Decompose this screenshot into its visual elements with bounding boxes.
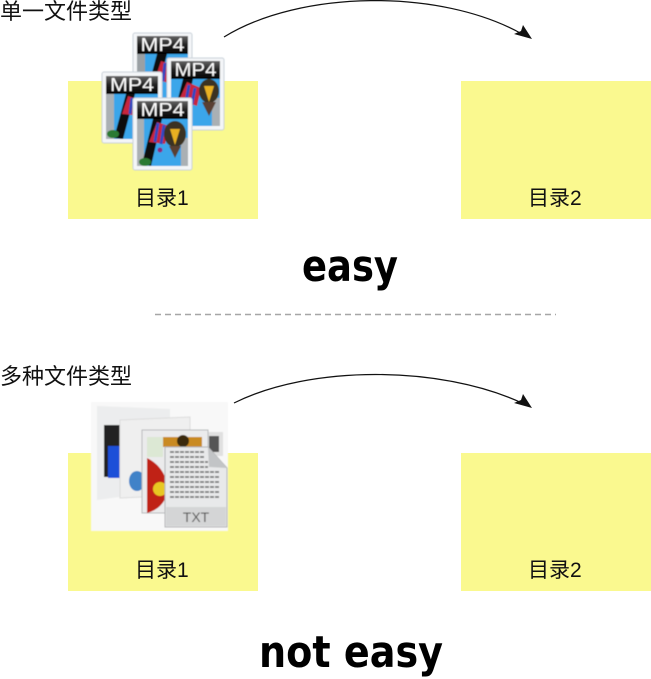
- arrow: move files (bottom): [234, 374, 532, 408]
- label: directory 1 (bottom): 目录1: [135, 559, 189, 582]
- icon: TXT document: TXT: [183, 509, 210, 525]
- label: directory 1 (top): 目录1: [135, 187, 189, 210]
- icon: mixed file types: [91, 402, 228, 531]
- panel: source directory 1 (bottom): [68, 453, 258, 591]
- panel: target directory 2 (bottom): [461, 453, 651, 591]
- heading: not easy: not easy: [259, 627, 443, 678]
- icon: MP4 back: MP4: [140, 35, 184, 55]
- heading: easy: easy: [302, 241, 398, 292]
- icon: MP4 left: MP4: [110, 75, 154, 95]
- icon: MP4 front: MP4: [140, 100, 184, 120]
- panel: target directory 2 (top): [461, 81, 651, 219]
- label: directory 2 (top): 目录2: [528, 187, 582, 210]
- label: directory 2 (bottom): 目录2: [528, 559, 582, 582]
- icon: MP4 right: MP4: [174, 60, 216, 80]
- arrow: move files (top): [224, 1, 532, 39]
- heading: multiple file types: 多种文件类型: [0, 364, 132, 389]
- panel: source directory 1 (top): [68, 81, 258, 219]
- icon: MP4 files group: [102, 33, 224, 170]
